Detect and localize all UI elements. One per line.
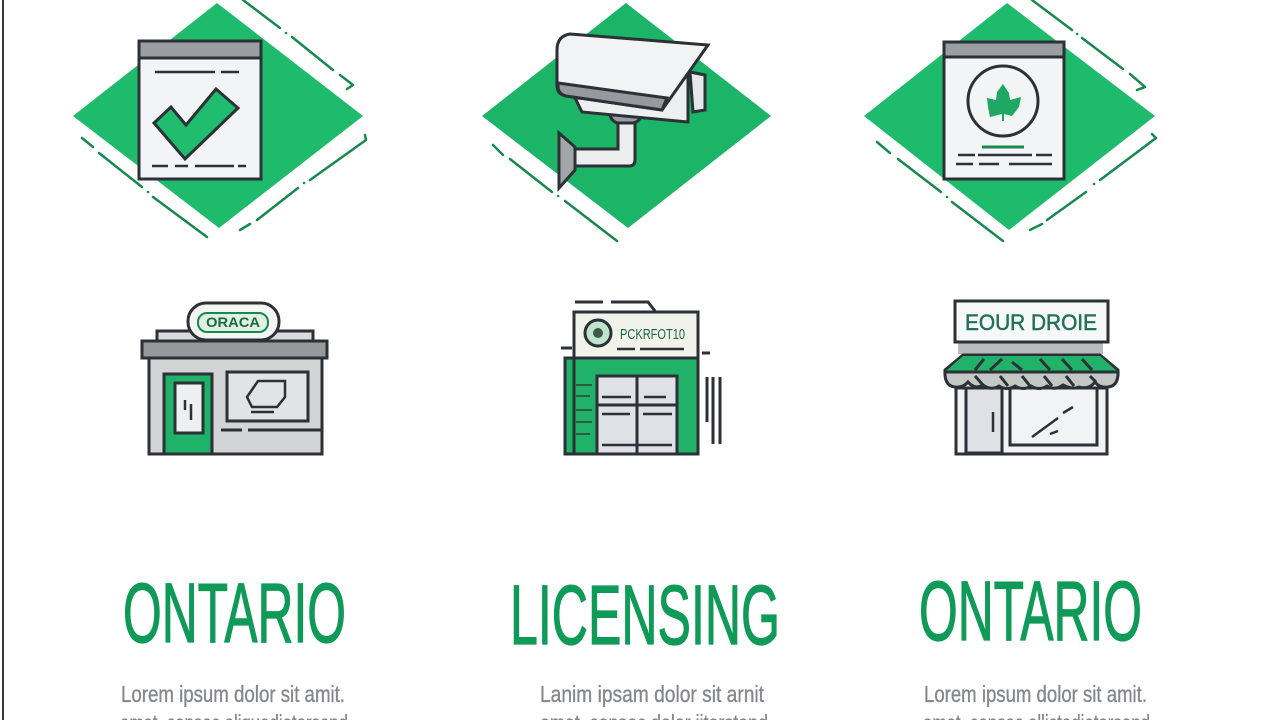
icon: storefront with oval sign [142, 303, 327, 454]
icon: green storefront with round logo: PCKRFOT10 [620, 326, 685, 343]
green diamond [73, 3, 363, 228]
icon: security camera [557, 34, 708, 188]
dashed frame [493, 145, 617, 241]
left border line [2, 0, 4, 720]
panel: checklist badge [73, 0, 366, 237]
column 2: heading: LICENSING [510, 568, 780, 662]
column 1: body text [120, 681, 348, 720]
column 3: body text [923, 681, 1150, 720]
icon: permit document with leaf [944, 42, 1064, 179]
column 1: body text: Lorem ipsum dolor sit amit. [121, 681, 345, 707]
column 3: body text: Lorem ipsum dolor sit amit. [924, 681, 1147, 707]
panel: security camera badge [482, 3, 771, 241]
green diamond [864, 3, 1155, 230]
icon: storefront with striped awning: EOUR DROIE [965, 310, 1097, 335]
green diamond [482, 3, 771, 228]
dashed frame [82, 0, 366, 237]
icon: storefront with oval sign: ORACA [206, 314, 260, 330]
dashed frame [877, 0, 1156, 241]
icon: document with check mark [139, 41, 261, 179]
column 1: heading: ONTARIO [123, 566, 346, 660]
icon: storefront with striped awning [945, 301, 1118, 454]
panel: leaf permit badge [864, 0, 1156, 241]
column 2: body text: Lanim ipsam dolor sit arnit [540, 681, 764, 707]
column 2: body text [540, 681, 768, 720]
icon: green storefront with round logo [561, 302, 720, 454]
